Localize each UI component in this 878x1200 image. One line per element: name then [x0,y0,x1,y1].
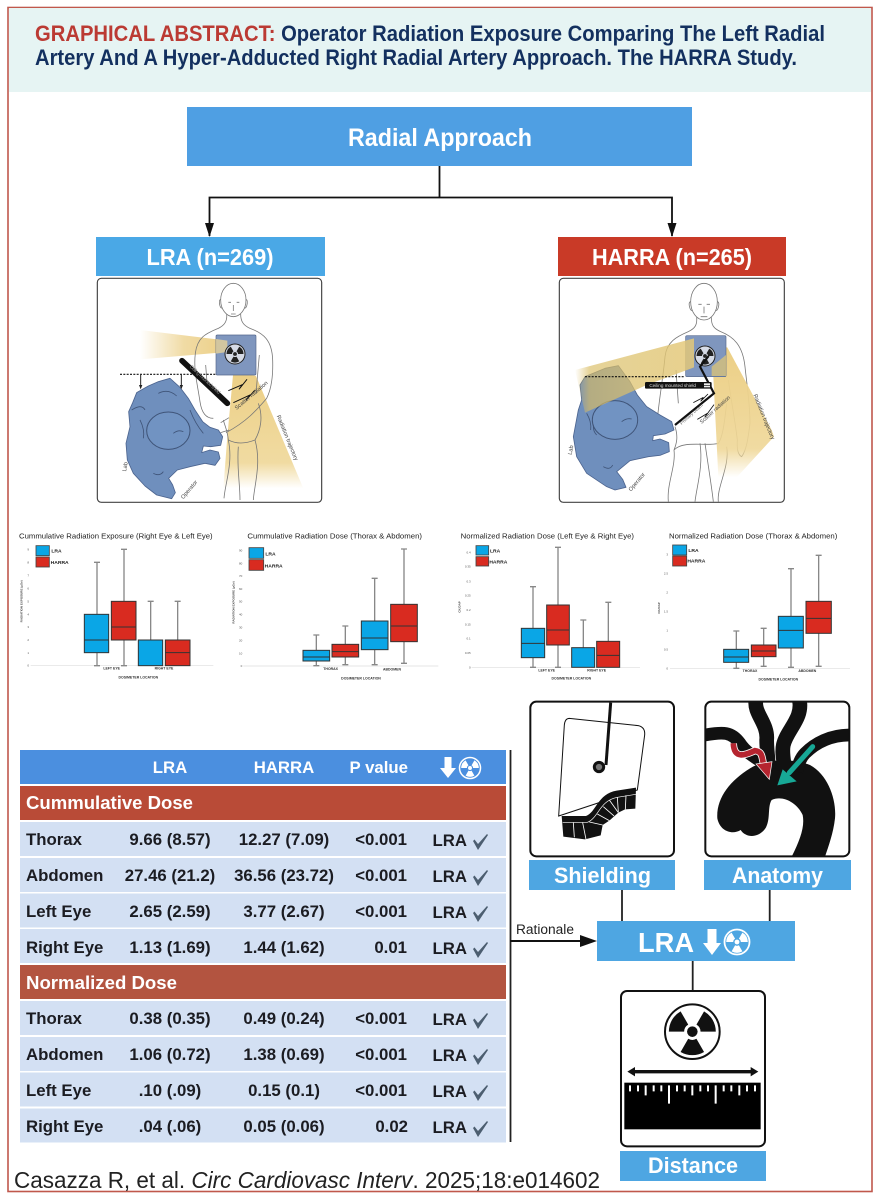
row: right eye cumulative: LRA [432,939,467,958]
chart: normalized dose thorax abdomen: ABDOMEN [798,669,817,673]
chart: cumulative dose thorax abdomen: 60 [239,587,243,591]
row: right eye cumulative: Right Eye [26,938,103,957]
band: normalized dose [20,965,506,999]
label: radiation trajectory: Radiation trajectory [275,415,299,462]
label: anatomy: Anatomy [732,863,823,888]
band: normalized dose: Normalized Dose [26,973,177,993]
band: cumulative dose [20,786,506,820]
scatter radiation: Scatter radiation [699,395,732,425]
box: LRA lower radiation [597,921,795,961]
row: abdomen cumulative: 27.46 (21.2) [125,866,215,885]
row: left eye cumulative [20,894,506,928]
rationale arrow [510,750,597,1142]
row: thorax cumulative: LRA [432,831,467,850]
radiation beam: HARRA downward right [713,347,774,477]
chart: cumulative exposure eye: LEFT EYE [103,667,121,671]
chart: normalized dose thorax abdomen: CK/DAP [657,602,661,614]
row: abdomen cumulative [20,858,506,892]
charts group left [19,533,438,681]
chart: cumulative dose thorax abdomen: RADIATION EXPOSURE (µGv) [232,581,236,624]
patient outline [657,283,750,502]
chart: normalized dose thorax abdomen: 1.5 [664,609,668,613]
row: abdomen normalized: <0.001 [355,1045,407,1064]
row: abdomen normalized [20,1037,506,1071]
row: left eye cumulative: LRA [432,903,467,922]
chart: normalized dose eye: 0.1 [467,637,471,641]
row: thorax normalized: <0.001 [355,1009,407,1028]
row: abdomen cumulative: <0.001 [355,866,407,885]
chart: normalized dose eye: 0.35 [465,565,471,569]
row: left eye normalized: LRA [432,1082,467,1101]
box: LRA lower radiation: LRA [638,927,694,958]
row: abdomen normalized: Abdomen [26,1045,103,1064]
chart: cumulative exposure eye: 2 [27,638,29,642]
row: left eye normalized: <0.001 [355,1081,407,1100]
label: radiation trajectory: Radiation trajectory [751,394,775,441]
chart: cumulative dose thorax abdomen: 10 [239,651,243,655]
chart: cumulative exposure eye [19,533,213,680]
table header: P value [350,758,408,777]
arrow: red right radial route [733,743,772,779]
ceiling mounted shield label: Ceiling mounted shield [649,383,696,389]
row: left eye normalized: .10 (.09) [139,1081,201,1100]
chart: cumulative dose thorax abdomen: 20 [239,638,243,642]
chart: normalized dose eye: 0.2 [467,608,471,612]
chart: cumulative dose thorax abdomen: 50 [239,600,243,604]
chart: normalized dose thorax abdomen: THORAX [743,669,758,673]
row: right eye normalized: LRA [432,1118,467,1137]
aortic arch and branches [705,700,850,857]
chart: cumulative dose thorax abdomen [232,533,438,681]
row: abdomen cumulative: 36.56 (23.72) [234,866,334,885]
row: right eye cumulative: 1.44 (1.62) [243,938,325,957]
chart: cumulative dose thorax abdomen: HARRA [265,563,283,569]
radiation beam: HARRA to the upper left [575,338,694,413]
detector: blue square [686,336,726,377]
chart: normalized dose eye: LEFT EYE [538,669,556,673]
box: radial approach: Radial Approach [348,124,532,152]
row: left eye normalized: 0.15 (0.1) [248,1081,320,1100]
ceiling mounted shield [182,361,227,403]
chart: cumulative dose thorax abdomen: LRA [265,551,276,557]
band: cumulative dose: Cummulative Dose [26,793,193,813]
dashed shield line [585,375,685,378]
chart: normalized dose eye: 0.25 [465,594,471,598]
chart: normalized dose eye: 0.4 [467,550,471,554]
chart: normalized dose thorax abdomen [657,533,850,682]
scatter radiation: Primary beam [679,403,704,426]
row: right eye normalized: 0.05 (0.06) [243,1117,325,1136]
chart: cumulative dose thorax abdomen: 80 [239,561,243,565]
scatter radiation: Scatter radiation [234,380,270,412]
radiation beam: LRA to the left [140,330,227,359]
row: right eye normalized: 0.02 [375,1117,408,1136]
chart: cumulative dose thorax abdomen: 70 [239,574,243,578]
title banner [9,8,871,92]
chart: normalized dose thorax abdomen: 2 [666,590,668,594]
chart: cumulative exposure eye: 8 [27,560,29,564]
row: right eye cumulative: 0.01 [374,938,407,957]
chart: normalized dose eye: 0 [469,665,471,669]
detector: blue square with radiation symbol [216,335,256,375]
row: abdomen cumulative: Abdomen [26,866,103,885]
radiation beam inside detector [712,355,726,376]
chart: normalized dose eye: CK/DAP [457,601,461,613]
label: distance: Distance [648,1153,738,1178]
chart: cumulative exposure eye: 5 [27,599,29,603]
panel: shielding icon [530,702,674,856]
title banner: Artery And A Hyper-Adducted Right Radial Artery Approach. The HARRA Study. [35,45,797,70]
row: thorax cumulative: <0.001 [355,830,407,849]
row: right eye normalized [20,1108,506,1142]
catheter path [675,356,714,425]
row: right eye cumulative [20,929,506,963]
chart: cumulative exposure eye: 9 [27,547,29,551]
radiation symbol [695,346,715,366]
box: LRA n=269: LRA (n=269) [146,244,274,270]
row: abdomen cumulative: LRA [432,867,467,886]
chart: cumulative exposure eye: 6 [27,586,29,590]
row: left eye cumulative: Left Eye [26,902,91,921]
chart: normalized dose thorax abdomen: LRA [688,548,699,554]
row: thorax normalized: LRA [432,1010,467,1029]
chart: cumulative dose thorax abdomen: 30 [239,626,243,630]
operator figure [573,366,674,490]
box: radial approach [187,107,692,166]
chart: normalized dose eye [457,533,640,680]
chart: cumulative exposure eye: Cummulative Radiation Exposure (Right Eye & Left Eye) [19,533,213,540]
panel: LRA illustration [97,278,322,502]
chart: cumulative dose thorax abdomen: THORAX [323,667,339,671]
chart: normalized dose thorax abdomen: DOSIMETER LOCATION [759,678,799,682]
chart: normalized dose thorax abdomen: 1 [666,628,668,632]
title banner: GRAPHICAL ABSTRACT: Operator Radiation Exposure Comparing The Left Radial [35,21,825,46]
chart: cumulative dose thorax abdomen: 90 [239,548,243,552]
row: thorax normalized: Thorax [26,1009,83,1028]
label: operator: Operator [180,480,199,501]
ceiling mounted shield: Ceiling mounted shield [188,364,221,396]
radiation beam: LRA downward [223,372,303,488]
charts group right [457,533,850,682]
chart: normalized dose eye: Normalized Radiation Dose (Left Eye & Right Eye) [461,533,634,540]
row: right eye normalized: .04 (.06) [139,1117,201,1136]
patient outline [195,283,273,500]
row: abdomen normalized: 1.06 (0.72) [129,1045,211,1064]
chart: cumulative dose thorax abdomen: 0 [241,664,243,668]
ruler [624,1083,761,1129]
row: thorax cumulative [20,822,506,856]
chart: normalized dose thorax abdomen: 0 [666,666,668,670]
operator figure [126,378,223,499]
rationale arrow: Rationale [516,922,574,937]
chart: normalized dose thorax abdomen: 2.5 [664,571,668,575]
box: HARRA n=265 [558,237,786,276]
row: left eye cumulative: 2.65 (2.59) [129,902,211,921]
chart: cumulative exposure eye: HARRA [51,560,69,566]
label: shielding: Shielding [554,863,651,888]
row: left eye cumulative: 3.77 (2.67) [243,902,325,921]
suspension arm [594,703,611,772]
panel: HARRA illustration [559,278,784,502]
chart: cumulative dose thorax abdomen: ABDOMEN [383,668,401,672]
table header: HARRA [254,758,314,777]
row: thorax normalized: 0.49 (0.24) [243,1009,325,1028]
row: thorax cumulative: 9.66 (8.57) [129,830,211,849]
chart: normalized dose eye: HARRA [489,559,508,565]
chart: cumulative dose thorax abdomen: DOSIMETER LOCATION [341,677,381,681]
chart: normalized dose thorax abdomen: Normalized Radiation Dose (Thorax & Abdomen) [669,533,837,540]
chart: cumulative exposure eye: 7 [27,573,29,577]
label: distance [620,1151,766,1181]
arrow: teal left radial route [777,747,813,785]
chart: cumulative exposure eye: RIGHT EYE [155,667,174,671]
chart: normalized dose thorax abdomen: 3 [666,552,668,556]
arrows: branch to study arms [205,166,676,237]
chart: cumulative exposure eye: 3 [27,625,29,629]
chart: normalized dose eye: DOSIMETER LOCATION [552,676,592,680]
chart: cumulative dose thorax abdomen: Cummulative Radiation Dose (Thorax & Abdomen) [247,533,422,540]
chart: cumulative exposure eye: DOSIMETER LOCATION [119,676,159,680]
label: operator: Operator [628,472,647,493]
chart: cumulative exposure eye: 4 [27,612,29,616]
table header [20,750,506,784]
chart: cumulative exposure eye: LRA [51,549,62,555]
ceiling mounted shield label [645,382,712,389]
results table [20,750,506,1142]
chart: normalized dose thorax abdomen: 0.5 [664,647,668,651]
radiation symbol [665,1004,720,1059]
chart: cumulative exposure eye: 0 [27,664,29,668]
row: right eye cumulative: 1.13 (1.69) [129,938,211,957]
connectors to rationale box [622,890,770,991]
chart: cumulative exposure eye: 1 [27,651,29,655]
chart: normalized dose eye: 0.05 [465,651,471,655]
ceiling shield pane [559,718,645,816]
chart: normalized dose eye: RIGHT EYE [587,669,607,673]
table header: LRA [153,758,187,777]
chart: cumulative exposure eye: RADIATION EXPOSURE (µSv) [20,580,24,622]
row: left eye normalized [20,1072,506,1106]
lead skirt [562,788,636,839]
dashed shield line with arrows [120,374,217,389]
chart: normalized dose eye: LRA [490,549,501,555]
row: abdomen normalized: LRA [432,1046,467,1065]
citation: Casazza R, et al. Circ Cardiovasc Interv. 2025;18:e014602 [14,1167,600,1193]
row: thorax normalized [20,1001,506,1035]
chart: normalized dose eye: 0.15 [465,622,471,626]
chart: cumulative dose thorax abdomen: 40 [239,613,243,617]
box: HARRA n=265: HARRA (n=265) [592,244,752,270]
row: abdomen normalized: 1.38 (0.69) [243,1045,325,1064]
row: thorax normalized: 0.38 (0.35) [129,1009,211,1028]
row: thorax cumulative: 12.27 (7.09) [239,830,329,849]
panel: distance icon [621,991,765,1146]
row: thorax cumulative: Thorax [26,830,83,849]
label: lab: Lab [568,445,575,455]
double-headed arrow [627,1067,758,1076]
label: anatomy [704,860,851,890]
label: shielding [529,860,675,890]
label: lab: Lab [122,462,130,472]
row: left eye normalized: Left Eye [26,1081,91,1100]
chart: normalized dose thorax abdomen: HARRA [687,559,706,565]
row: right eye normalized: Right Eye [26,1117,103,1136]
panel: anatomy icon [705,700,850,857]
box: LRA n=269 [96,237,325,276]
scatter radiation [679,394,732,426]
row: left eye cumulative: <0.001 [355,902,407,921]
chart: normalized dose eye: 0.3 [467,579,471,583]
